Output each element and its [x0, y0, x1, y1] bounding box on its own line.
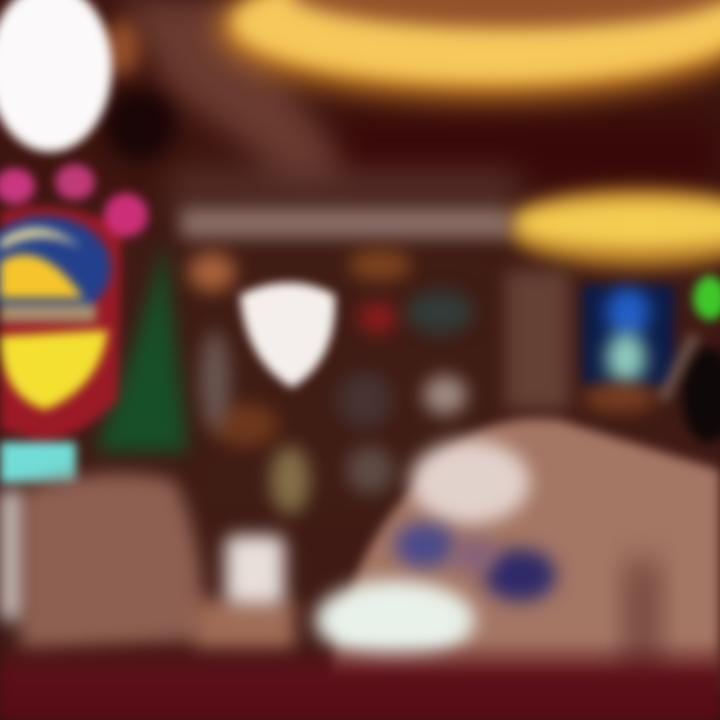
pink bow centre [55, 164, 95, 200]
dark ceiling blob [104, 89, 176, 161]
floor [0, 640, 720, 720]
white napkin [225, 535, 285, 605]
sign pale band [0, 304, 96, 322]
orange glow [104, 20, 140, 76]
back wall shelves [180, 208, 510, 525]
low table left [195, 600, 295, 650]
dark figure right [682, 347, 720, 443]
pink bow right [104, 193, 148, 237]
pink bow left [0, 168, 35, 204]
mint white cloth [315, 580, 475, 660]
sign yellow top [0, 254, 84, 298]
sign blue panel [0, 216, 111, 320]
right ceiling light [504, 188, 720, 268]
sign cream arc [0, 228, 82, 250]
white seat left edge [0, 490, 20, 620]
navy cloth [395, 523, 556, 601]
right pillar [505, 270, 570, 410]
window panel [582, 285, 674, 412]
ceiling [0, 0, 720, 200]
white globe lamp [0, 0, 112, 152]
cyan base [0, 442, 76, 482]
ceiling ring light [218, 0, 720, 98]
diagonal pole [662, 335, 695, 400]
sign frame [0, 206, 122, 440]
right shadow [625, 560, 660, 690]
foreground booth right [330, 419, 720, 690]
sign yellow bottom [0, 330, 108, 410]
green accent [693, 276, 720, 320]
white cushion [410, 440, 530, 524]
christmas tree [95, 240, 188, 452]
foreground booth left [20, 473, 205, 650]
white shield emblem [240, 282, 335, 388]
colorful left sign [0, 164, 148, 440]
